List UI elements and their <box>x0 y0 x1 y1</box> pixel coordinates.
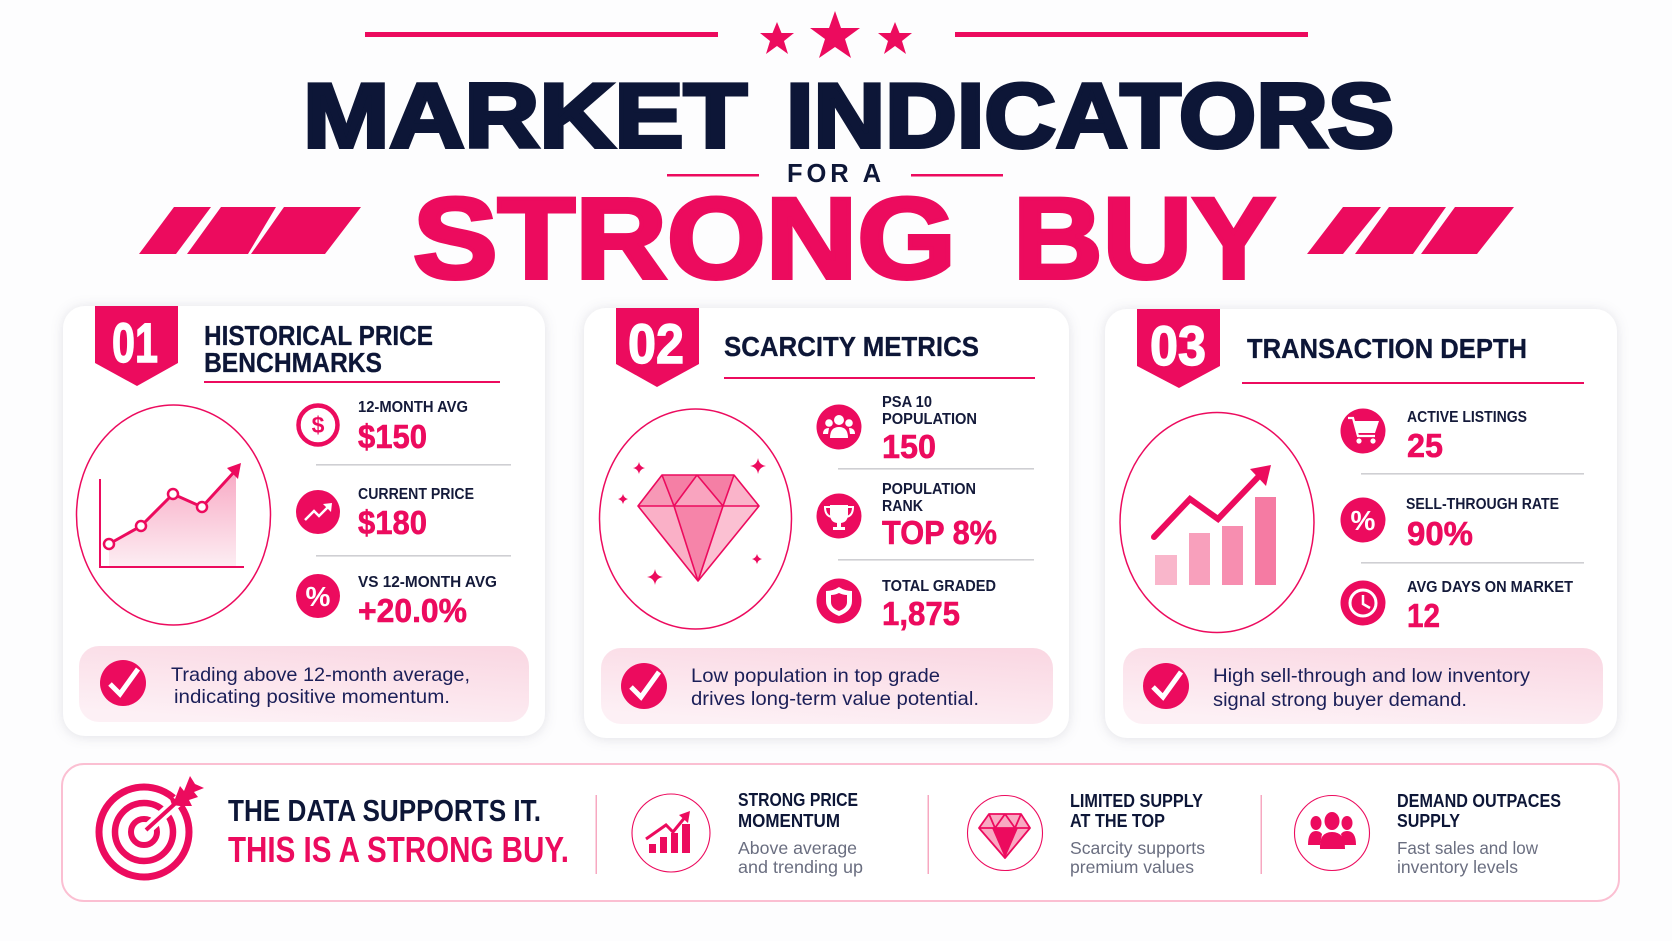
decorative slashes left <box>139 207 361 254</box>
item: strong price momentum <box>632 790 863 877</box>
item: limited supply at the top: AT THE TOP <box>1070 811 1165 831</box>
decorative slashes right <box>1307 207 1514 254</box>
callout <box>601 648 1053 724</box>
item: demand outpaces supply: Fast sales and low <box>1397 838 1538 858</box>
metric: vs 12-month avg: VS 12-MONTH AVG <box>358 574 497 591</box>
item: strong price momentum: Above average <box>738 838 857 858</box>
badge 01: 01 <box>112 311 158 374</box>
metric: psa 10 population: 150 <box>882 428 936 465</box>
statement text: THIS IS A STRONG BUY. <box>228 829 569 870</box>
item: demand outpaces supply: DEMAND OUTPACES <box>1397 791 1561 811</box>
metric: 12-month avg: $ <box>312 412 325 438</box>
metric: total graded: 1,875 <box>882 595 960 632</box>
title: market indicators <box>303 66 1394 167</box>
metric: current price: $180 <box>358 504 427 541</box>
diamond illustration <box>600 409 792 629</box>
metric: current price <box>296 486 474 541</box>
title: market indicators: INDICATORS <box>786 66 1394 167</box>
item: demand outpaces supply <box>1294 791 1561 877</box>
metric: vs 12-month avg: % <box>306 581 331 612</box>
metric: sell-through rate: 90% <box>1407 515 1473 552</box>
metric: 12-month avg <box>298 399 468 455</box>
metric: avg days on market: AVG DAYS ON MARKET <box>1407 579 1573 596</box>
heading <box>204 320 500 383</box>
header ornament: lines and stars <box>365 11 1308 58</box>
panel: historical price benchmarks <box>63 306 545 736</box>
title: strong buy: STRONG <box>413 175 956 303</box>
statement text: THE DATA SUPPORTS IT. <box>228 793 541 828</box>
callout: drives long-term value potential. <box>691 688 979 710</box>
metric: avg days on market: 12 <box>1407 597 1440 634</box>
title: market indicators: MARKET <box>303 66 747 167</box>
metric: 12-month avg: 12-MONTH AVG <box>358 399 468 416</box>
callout <box>1123 648 1603 724</box>
heading: HISTORICAL PRICE <box>204 320 433 351</box>
metric: current price: CURRENT PRICE <box>358 486 474 503</box>
item: strong price momentum: MOMENTUM <box>738 811 840 831</box>
heading: SCARCITY METRICS <box>724 331 979 362</box>
panel: transaction depth <box>1105 309 1617 738</box>
metric: population rank <box>816 481 997 551</box>
item: limited supply at the top: LIMITED SUPPLY <box>1070 791 1203 811</box>
metric: 12-month avg: $150 <box>358 418 427 455</box>
metric: vs 12-month avg <box>296 574 497 629</box>
panel: conclusion banner <box>62 764 1619 901</box>
metric: psa 10 population: POPULATION <box>882 411 977 428</box>
badge 03 <box>1137 309 1220 388</box>
metric: psa 10 population <box>816 394 977 465</box>
metric: sell-through rate: SELL-THROUGH RATE <box>1406 496 1559 513</box>
metric: psa 10 population: PSA 10 <box>882 394 932 411</box>
metric: active listings: ACTIVE LISTINGS <box>1407 409 1527 426</box>
callout: Low population in top grade <box>691 665 940 687</box>
badge 02 <box>616 308 699 387</box>
subtitle: for a: FOR A <box>787 160 881 188</box>
item: demand outpaces supply: SUPPLY <box>1397 811 1460 831</box>
metric: sell-through rate <box>1340 496 1559 552</box>
bar chart illustration <box>1120 412 1314 632</box>
statement text <box>228 793 569 870</box>
badge 03: 03 <box>1150 314 1206 377</box>
metric: population rank: RANK <box>882 498 924 515</box>
metric: population rank: TOP 8% <box>882 514 997 551</box>
heading: TRANSACTION DEPTH <box>1247 333 1527 364</box>
item: demand outpaces supply: inventory levels <box>1397 857 1518 877</box>
metric: active listings <box>1340 408 1527 464</box>
callout: indicating positive momentum. <box>174 686 450 708</box>
metric: population rank: POPULATION <box>882 481 976 498</box>
callout <box>79 646 529 722</box>
badge 02: 02 <box>628 312 684 375</box>
callout: signal strong buyer demand. <box>1213 689 1467 711</box>
callout: Trading above 12-month average, <box>171 664 470 686</box>
line chart illustration <box>76 405 270 625</box>
callout: High sell-through and low inventory <box>1213 665 1530 687</box>
metric: vs 12-month avg: +20.0% <box>358 592 467 629</box>
metric: total graded: TOTAL GRADED <box>882 578 996 595</box>
metric: active listings: 25 <box>1407 427 1443 464</box>
title: strong buy: BUY <box>1013 175 1275 303</box>
metric: sell-through rate: % <box>1351 505 1376 536</box>
item: strong price momentum: and trending up <box>738 857 863 877</box>
metric: avg days on market <box>1340 579 1573 634</box>
item: limited supply at the top: premium values <box>1070 857 1194 877</box>
badge 01 <box>95 306 178 386</box>
item: strong price momentum: STRONG PRICE <box>738 790 858 810</box>
item: limited supply at the top <box>968 791 1205 877</box>
heading: BENCHMARKS <box>204 347 382 378</box>
panel: scarcity metrics <box>584 308 1069 738</box>
item: limited supply at the top: Scarcity supports <box>1070 838 1205 858</box>
icon: target with arrow <box>99 776 204 877</box>
title: strong buy <box>413 175 1275 303</box>
metric: total graded <box>816 578 996 632</box>
